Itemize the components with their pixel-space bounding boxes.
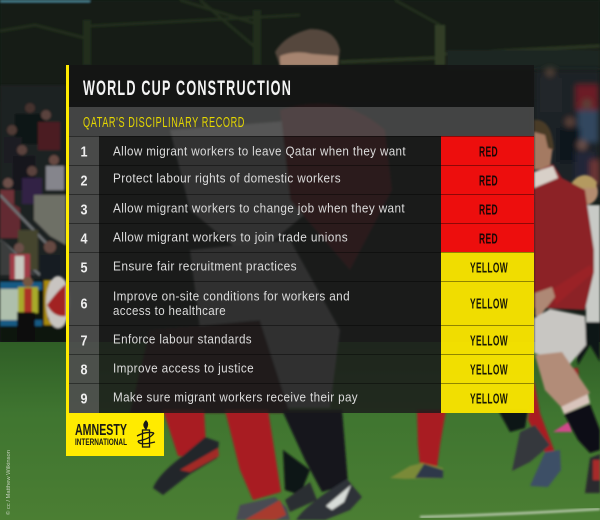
row 5 [80, 260, 508, 276]
right player [534, 120, 600, 493]
title: WORLD CUP CONSTRUCTION [83, 77, 292, 100]
ball [46, 276, 70, 328]
panel: title band [69, 65, 534, 107]
shirt [534, 164, 594, 310]
row 7 [80, 332, 508, 350]
row 7: YELLOW [470, 334, 508, 350]
row 7: 7 [80, 334, 88, 350]
row 4: RED [479, 232, 498, 248]
left crowd [0, 85, 66, 295]
row 4 [80, 230, 498, 248]
data table panel [66, 65, 534, 413]
white shorts [534, 309, 586, 364]
steward in hi-vis vest [18, 287, 38, 313]
icon: candle in barbed wire [137, 421, 155, 447]
row 6: 6 [80, 296, 88, 312]
boots [153, 437, 219, 495]
black sock [564, 404, 600, 453]
boot [585, 454, 600, 493]
central player [130, 29, 392, 520]
panel: yellow status cells [441, 252, 534, 413]
row 6: Improve on-site conditions for workers and [113, 290, 350, 304]
row 9: YELLOW [470, 392, 508, 408]
Amnesty International logo block [66, 413, 164, 456]
dark leg under panel [130, 320, 290, 413]
row 2: Protect labour rights of domestic workers [113, 172, 341, 186]
row 5: Ensure fair recruitment practices [113, 260, 297, 274]
row 3 [80, 202, 498, 218]
row 1: RED [479, 144, 498, 160]
row 4: 4 [80, 232, 88, 248]
row 8: YELLOW [470, 362, 508, 378]
row 2 [80, 172, 498, 190]
spectating player in white behind [572, 179, 598, 205]
row 8: 8 [80, 362, 88, 378]
row 8: Improve access to justice [113, 362, 254, 376]
black leg [282, 410, 348, 492]
photo credit: © cc / Matthew Wilkinson [5, 450, 12, 515]
arm and hand [551, 265, 594, 305]
row 8 [80, 362, 508, 378]
row 3: 3 [80, 202, 88, 218]
subtitle: QATAR'S DISCIPLINARY RECORD [83, 114, 245, 131]
row 6 [80, 290, 508, 318]
panel: rows background [99, 136, 441, 413]
row 9: 9 [80, 392, 88, 408]
row 4: Allow migrant workers to join trade unions [113, 230, 348, 244]
white kit teammate under panel [170, 120, 310, 260]
row 9 [80, 390, 508, 408]
row 9: Make sure migrant workers receive their pay [113, 390, 358, 404]
row 7: Enforce labour standards [113, 332, 252, 346]
panel: subtitle band [69, 107, 534, 136]
head: hair and face [275, 29, 340, 66]
row 5: YELLOW [470, 260, 508, 276]
Amnesty International logo block: AMNESTY [75, 422, 127, 439]
grass pitch [0, 342, 600, 520]
row 3: RED [479, 202, 498, 218]
panel: red status cells [441, 136, 534, 252]
row 1: Allow migrant workers to leave Qatar when they want [113, 144, 406, 158]
right crowd [534, 67, 600, 200]
left advertising boards and pitch edge [0, 276, 70, 342]
row 1: 1 [80, 144, 88, 160]
row 2: RED [479, 174, 498, 190]
stadium roof and back wall [0, 0, 600, 100]
row 6: access to healthcare [113, 304, 226, 318]
red shirt under panel [280, 103, 392, 270]
background player red socks and boots [390, 380, 572, 487]
row 6: YELLOW [470, 296, 508, 312]
row 2: 2 [80, 174, 88, 190]
row 5: 5 [80, 260, 88, 276]
yellow accent bar [66, 65, 69, 413]
red socks [163, 410, 206, 456]
row 3: Allow migrant workers to change job when they want [113, 202, 405, 216]
Amnesty International logo block: INTERNATIONAL [75, 437, 127, 448]
head [534, 121, 553, 170]
pitch line [420, 509, 600, 517]
sock rings [561, 394, 590, 414]
row 1 [80, 144, 498, 160]
panel: number column [69, 136, 99, 413]
leg [535, 352, 590, 408]
